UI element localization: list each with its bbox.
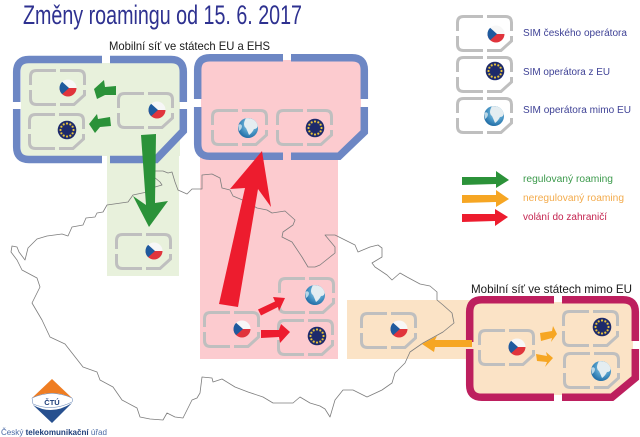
legend item: non-EU operator SIM: SIM operátora mimo EU: [523, 105, 631, 116]
SIM: Czech, orange panel home: [362, 314, 416, 348]
arrow: small green bottom: [89, 114, 111, 133]
arrow: small red upper: [258, 297, 285, 316]
SIM: EU, inside non-EU frame: [564, 312, 618, 346]
SIM frame: EU/EEA abroad: [198, 58, 364, 156]
SIM: EU, pink panel: [278, 110, 332, 144]
heading: non-EU network: Mobilní síť ve státech mimo EU: [471, 282, 632, 296]
SIM: non-EU, pink panel: [212, 110, 266, 144]
SIM: Czech, green panel right: [118, 94, 172, 128]
arrow: small red lower: [261, 324, 290, 343]
SIM: non-EU target: [280, 278, 334, 312]
legend item: regulated roaming: [462, 171, 613, 188]
legend item: unregulated roaming: [462, 190, 624, 207]
legend item: EU operator SIM: SIM operátora z EU: [523, 67, 610, 78]
arrow: small green top: [94, 80, 116, 99]
legend item: calls abroad: [462, 209, 607, 226]
legend: SIM types: [458, 16, 631, 132]
SIM frame: outside EU: [470, 300, 635, 397]
SIM: Czech, calling abroad: [204, 312, 258, 346]
legend item: unregulated roaming: neregulovaný roaming: [523, 193, 624, 204]
logo: ČTÚ: [1, 379, 107, 437]
map of Czech Republic: [11, 171, 454, 420]
SIM: Czech, inside non-EU frame: [480, 330, 534, 364]
legend item: Czech operator SIM: SIM českého operátora: [523, 28, 627, 39]
SIM: Czech, at home: [116, 234, 170, 268]
legend item: Czech operator SIM: [458, 16, 627, 50]
legend: arrows: [462, 171, 624, 226]
arrow: big red up: [219, 151, 271, 307]
legend item: non-EU operator SIM: [458, 98, 631, 132]
background panel: orange: [347, 300, 633, 395]
arrow: big green down: [133, 134, 168, 227]
legend item: calls abroad: volání do zahraničí: [523, 212, 607, 223]
arrow: small orange upper: [540, 326, 557, 342]
SIM: EU, green panel bottom: [30, 114, 84, 148]
background panel: pink: [200, 60, 361, 359]
legend item: regulated roaming: regulovaný roaming: [523, 174, 613, 185]
SIM: EU target: [278, 320, 332, 354]
arrow: big orange left: [422, 336, 472, 352]
SIM frame: EU/EEA home: [17, 60, 183, 160]
logo wordmark: Český telekomunikační úřad: [1, 427, 107, 437]
SIM: non-EU, inside non-EU frame: [564, 354, 618, 388]
SIM: Czech, green panel top: [30, 70, 84, 104]
arrow: small orange lower: [536, 352, 553, 367]
logo mark: ČTÚ: [44, 398, 60, 407]
heading: EU and EEA network: Mobilní síť ve státech EU a EHS: [109, 39, 270, 53]
title: Změny roamingu od 15. 6. 2017: [23, 0, 302, 30]
legend item: EU operator SIM: [458, 58, 610, 92]
background panel: green: [21, 63, 180, 276]
